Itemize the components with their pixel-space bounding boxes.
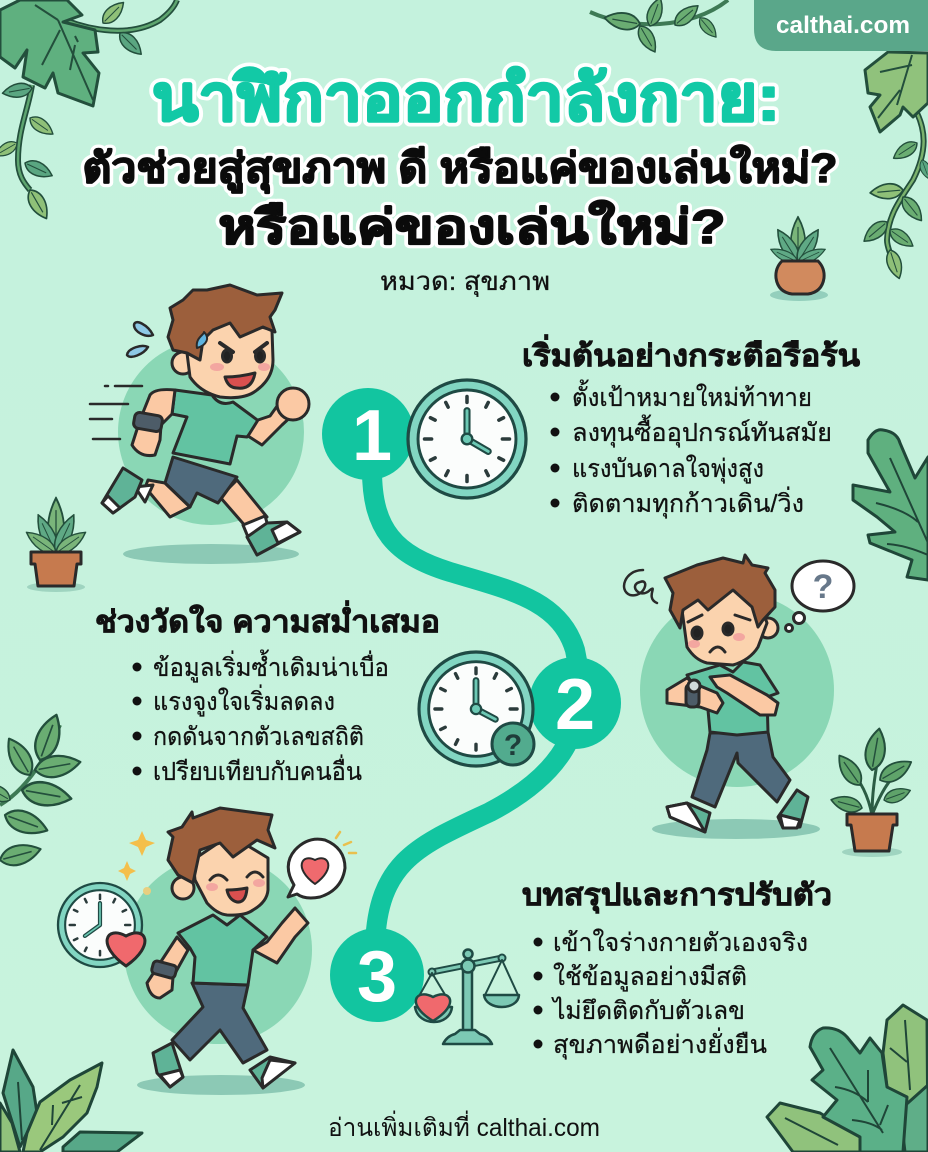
step 3 marker: 3	[357, 937, 397, 1017]
decoration: top-right foliage	[860, 52, 928, 281]
title	[82, 62, 838, 253]
icon: balance scale with heart	[415, 950, 519, 1044]
potted plant: right	[829, 727, 915, 857]
left arm	[147, 937, 188, 998]
character: runner	[90, 285, 309, 564]
title line 2: ตัวช่วยสู่สุขภาพ ดี หรือแค่ของเล่นใหม่?	[82, 144, 838, 194]
scribble	[624, 570, 657, 603]
hair	[665, 555, 775, 628]
title: ตัวช่วยสู่สุขภาพ ดี หรือแค่ของเล่นใหม่?	[82, 144, 838, 194]
shoes	[153, 1043, 183, 1087]
heading: เริ่มต้นอย่างกระตือรือร้น	[522, 334, 861, 373]
icon: clock 2 with question badge	[419, 652, 534, 766]
title: หรือแค่ของเล่นใหม่?	[218, 199, 726, 253]
bullet list	[550, 379, 832, 519]
bullet list: ลงทุนซื้ออุปกรณ์ทันสมัย	[572, 414, 832, 448]
decoration: bottom-right foliage	[767, 1005, 928, 1152]
hair	[168, 285, 282, 360]
bullet list: กดดันจากตัวเลขสถิติ	[153, 723, 364, 751]
ear	[758, 618, 778, 638]
panel: step 1 text	[522, 334, 861, 519]
face	[193, 835, 268, 915]
left arm	[132, 390, 175, 456]
timeline path	[372, 470, 580, 945]
bullet list: เข้าใจร่างกายตัวเองจริง	[553, 928, 808, 957]
step 2 marker: 2	[555, 665, 595, 745]
footer: อ่านเพิ่มเติมที่ calthai.com	[328, 1110, 600, 1142]
shirt	[687, 662, 778, 735]
bullet list: เปรียบเทียบกับคนอื่น	[153, 754, 362, 786]
heading: บทสรุปและการปรับตัว	[522, 879, 832, 914]
step 3 marker	[330, 928, 424, 1022]
decoration: left-middle branch	[0, 711, 82, 869]
right arm	[253, 908, 308, 963]
ear	[172, 877, 194, 899]
decoration: bottom-left foliage	[0, 1050, 142, 1152]
step 1 marker: 1	[352, 396, 392, 476]
category label: หมวด: สุขภาพ	[380, 266, 550, 297]
panel: step 3 text	[522, 879, 832, 1060]
heading: ช่วงวัดใจ ความสม่ำเสมอ	[95, 600, 440, 639]
bullet list: ตั้งเป้าหมายใหม่ท้าทาย	[572, 379, 812, 412]
title line 3: หรือแค่ของเล่นใหม่?	[218, 199, 726, 253]
pants	[692, 732, 790, 807]
ear	[172, 352, 194, 374]
face	[682, 590, 767, 665]
badge: calthai.com: calthai.com	[776, 12, 910, 39]
speech bubble with heart	[288, 832, 356, 898]
step 2 marker	[529, 657, 621, 749]
character: happy walker	[58, 808, 356, 1095]
front leg	[220, 480, 267, 528]
bullet list: ข้อมูลเริ่มซ้ำเดิมน่าเบื่อ	[153, 649, 389, 683]
right arm	[710, 675, 778, 715]
title: นาฬิกาออกกำลังกาย:	[152, 62, 780, 134]
badge: calthai.com	[754, 0, 928, 51]
step 1 marker	[322, 388, 414, 480]
bullet list: แรงจูงใจเริ่มลดลง	[153, 684, 335, 717]
face	[186, 315, 273, 398]
bullet list	[534, 928, 808, 1060]
shirt	[172, 390, 260, 464]
thought bubble: ?	[813, 568, 833, 606]
bullet list: สุขภาพดีอย่างยั่งยืน	[553, 1027, 767, 1060]
back leg	[143, 480, 190, 517]
decoration: top-left foliage	[0, 0, 177, 222]
bullet list: แรงบันดาลใจพุ่งสูง	[572, 454, 764, 484]
left arm	[667, 678, 723, 713]
potted plant: top right	[769, 217, 828, 301]
character: confused walker	[624, 555, 854, 839]
shorts	[165, 457, 237, 507]
potted plant: left	[23, 498, 89, 592]
decoration: top-center vine	[590, 0, 728, 55]
hair	[168, 808, 275, 883]
decoration: right-middle leaf	[853, 430, 928, 580]
pants	[172, 983, 267, 1063]
icon: clock with heart	[58, 883, 145, 967]
shirt	[178, 915, 267, 985]
panel: step 2 text	[95, 600, 440, 786]
bullet list	[132, 649, 389, 786]
icon: clock 2 with question badge: ?	[504, 729, 522, 762]
sparkles	[118, 831, 155, 881]
title line 1: นาฬิกาออกกำลังกาย:	[152, 62, 780, 134]
bullet list: ติดตามทุกก้าวเดิน/วิ่ง	[572, 486, 804, 519]
bullet list: ใช้ข้อมูลอย่างมีสติ	[553, 962, 747, 992]
thought bubble	[786, 561, 854, 632]
bullet list: ไม่ยึดติดกับตัวเลข	[551, 996, 745, 1025]
right arm	[248, 395, 296, 445]
icon: clock 1	[408, 380, 526, 498]
shoes	[667, 803, 710, 832]
